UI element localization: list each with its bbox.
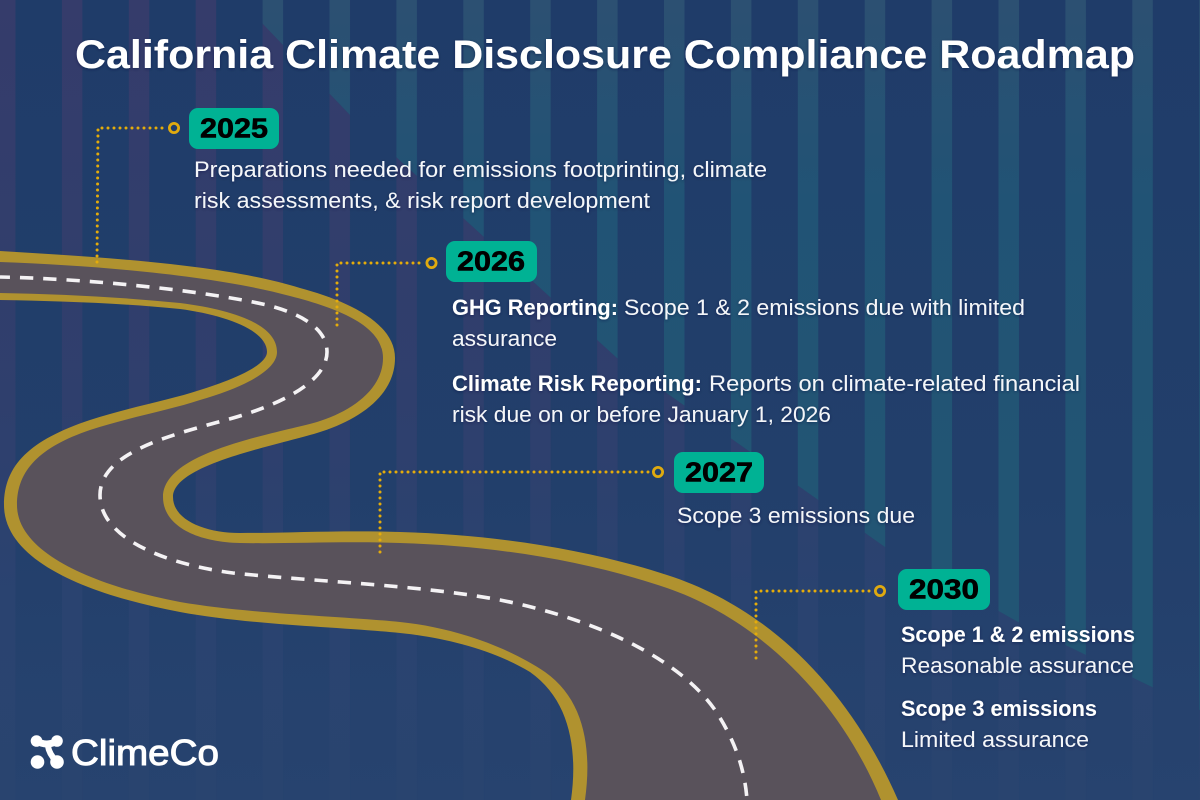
- text block: 2030: [901, 622, 1135, 752]
- text block: 2026: Climate Risk Reporting:: [452, 371, 702, 396]
- road illustration: [0, 251, 898, 800]
- title: California Climate Disclosure Compliance Roadmap: [75, 33, 1135, 77]
- text block: 2026: assurance: [452, 326, 557, 351]
- text block: 2025: Preparations needed for emissions footprinting, climate: [194, 157, 767, 182]
- milestone badge: 2025: 2025: [200, 112, 268, 144]
- logo wordmark: ClimeCo: [71, 732, 219, 773]
- road gold edging: [0, 251, 898, 800]
- text block: 2026: Scope 1 & 2 emissions due with limited: [624, 295, 1025, 320]
- text block: 2030: Scope 3 emissions: [901, 696, 1097, 721]
- milestone badge: 2026: 2026: [457, 246, 525, 276]
- text block: 2025: [194, 157, 767, 213]
- milestone badge: 2025: [189, 108, 279, 149]
- connector: 2025: [97, 123, 179, 262]
- milestone badge: 2030: 2030: [909, 574, 979, 604]
- text block: 2027: Scope 3 emissions due: [677, 503, 915, 528]
- milestone badge: 2027: [674, 452, 764, 493]
- connector: 2030: [756, 586, 885, 658]
- milestone badge: 2027: 2027: [685, 456, 753, 488]
- text block: 2030: Scope 1 & 2 emissions: [901, 622, 1135, 647]
- connector: 2027: [380, 467, 663, 552]
- text block: 2030: Reasonable assurance: [901, 653, 1134, 678]
- text block: 2026: [452, 295, 1080, 427]
- text block: 2025: risk assessments, & risk report development: [194, 188, 650, 213]
- text block: 2026: risk due on or before January 1, 2026: [452, 402, 831, 427]
- logo: ClimeCo: [31, 732, 219, 773]
- road dashed centre line: [0, 277, 747, 800]
- icon: ClimeCo knot: [31, 735, 64, 769]
- milestone badge: 2030: [898, 569, 990, 610]
- text block: 2030: Limited assurance: [901, 727, 1089, 752]
- text block: 2026: Reports on climate-related financial: [709, 371, 1080, 396]
- milestone badge: 2026: [446, 241, 537, 282]
- connector: 2026: [337, 258, 436, 325]
- road asphalt surface: [0, 262, 881, 800]
- text block: 2026: GHG Reporting:: [452, 295, 618, 320]
